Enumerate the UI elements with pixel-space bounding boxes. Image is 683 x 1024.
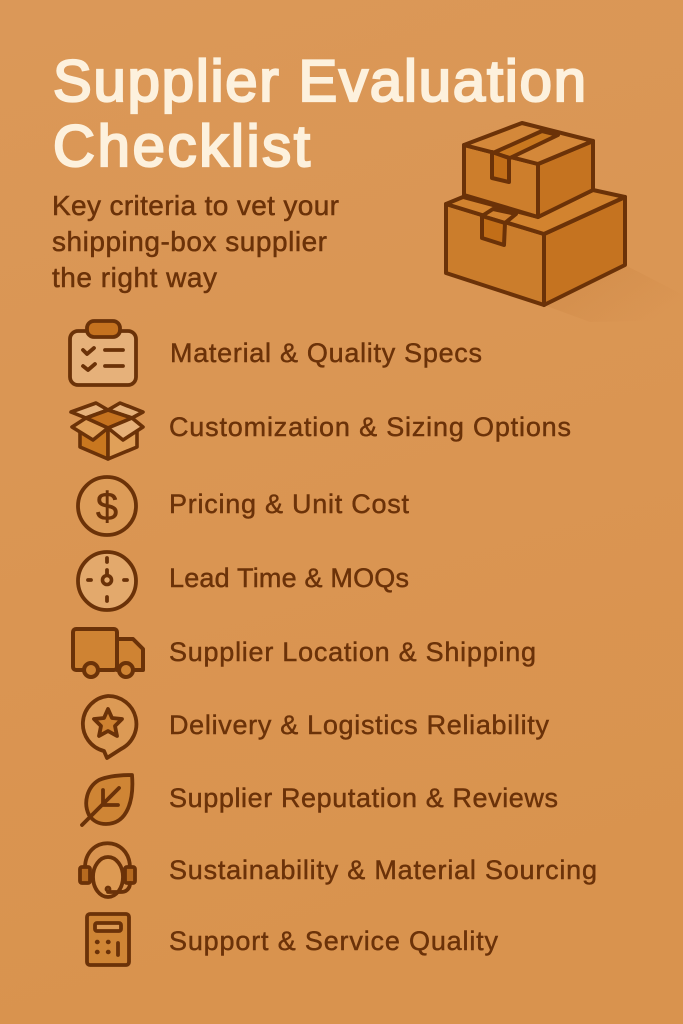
checklist items: Delivery & Logistics Reliability (169, 710, 550, 740)
illustration: stacked shipping boxes (446, 123, 683, 322)
checklist items: Pricing & Unit Cost (169, 489, 409, 519)
icon: open box (71, 403, 143, 459)
subtitle: the right way (52, 262, 217, 293)
icon: delivery truck (73, 629, 143, 677)
subtitle (52, 190, 339, 293)
checklist items: Supplier Location & Shipping (169, 637, 536, 667)
checklist items: Sustainability & Material Sourcing (169, 855, 597, 885)
checklist items: Customization & Sizing Options (169, 412, 571, 442)
checklist items: Support & Service Quality (169, 926, 498, 956)
subtitle: Key criteria to vet your (52, 190, 339, 221)
title: Supplier Evaluation (53, 49, 586, 114)
icon: star speech bubble (83, 696, 136, 758)
icon: leaf (82, 775, 132, 825)
subtitle: shipping-box supplier (52, 226, 327, 257)
icon: dollar coin (78, 477, 136, 535)
checklist items (169, 338, 597, 956)
checklist items: Supplier Reputation & Reviews (169, 783, 558, 813)
title: Checklist (53, 114, 310, 179)
icon: calculator (87, 914, 129, 965)
icon: dollar coin: $ (96, 485, 118, 529)
checklist items: Lead Time & MOQs (169, 563, 409, 593)
icon: clock (78, 552, 136, 610)
title (53, 49, 586, 179)
checklist items: Material & Quality Specs (170, 338, 482, 368)
icon: headset (80, 843, 135, 897)
icon: clipboard (70, 321, 136, 385)
